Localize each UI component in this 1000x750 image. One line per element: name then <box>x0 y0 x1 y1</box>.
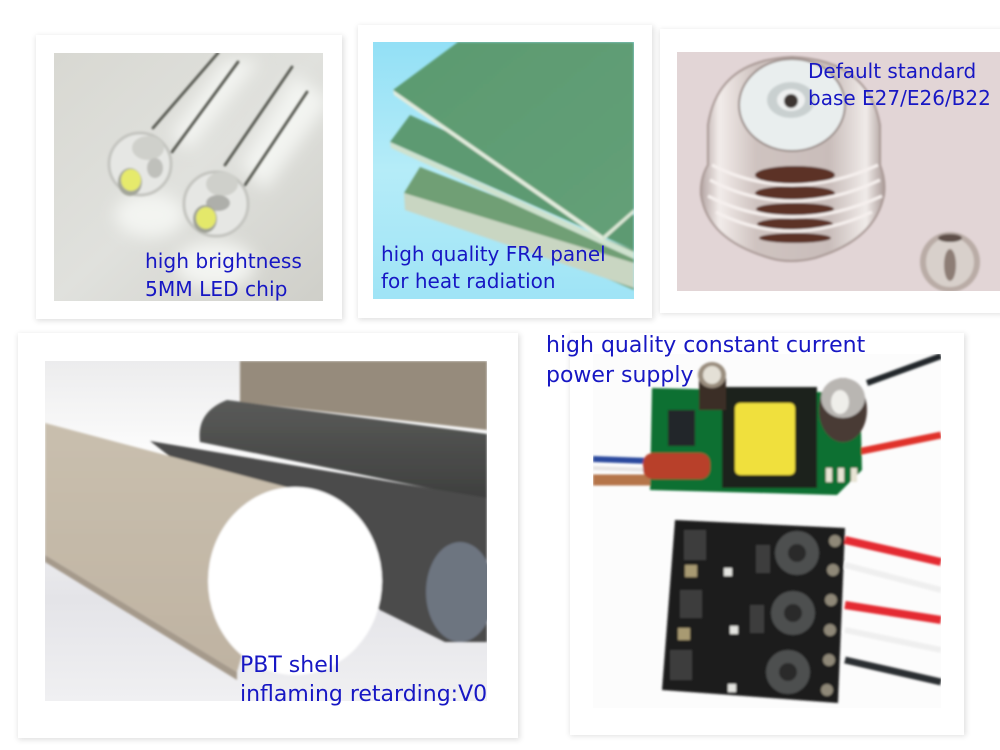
driver wires lower <box>845 540 941 682</box>
photo: metal lamp base <box>677 52 1000 292</box>
photo: LED chips <box>54 53 330 301</box>
caption: power supply: high quality constant current <box>546 333 865 358</box>
photo: driver boards <box>593 354 941 708</box>
driver wires upper <box>593 356 941 480</box>
caption: lamp base: base E27/E26/B22 <box>808 86 991 110</box>
photo: FR4 boards <box>373 42 634 299</box>
caption: LED chip: 5MM LED chip <box>145 277 287 301</box>
panel: PBT shell <box>18 333 518 738</box>
caption: PBT shell: PBT shell <box>240 653 340 678</box>
panel: power supply <box>570 333 964 735</box>
caption: power supply: power supply <box>546 363 693 388</box>
caption: PBT shell: inflaming retarding:V0 <box>240 682 487 707</box>
panel: lamp base <box>660 29 1000 313</box>
caption: LED chip: high brightness <box>145 249 302 273</box>
caption: FR4 panel: high quality FR4 panel <box>381 242 606 266</box>
photo: PBT rods <box>45 361 494 701</box>
panel: FR4 panel <box>358 25 652 318</box>
caption: FR4 panel: for heat radiation <box>381 269 556 293</box>
panel: LED chip <box>36 35 342 319</box>
caption: lamp base: Default standard <box>808 59 976 83</box>
